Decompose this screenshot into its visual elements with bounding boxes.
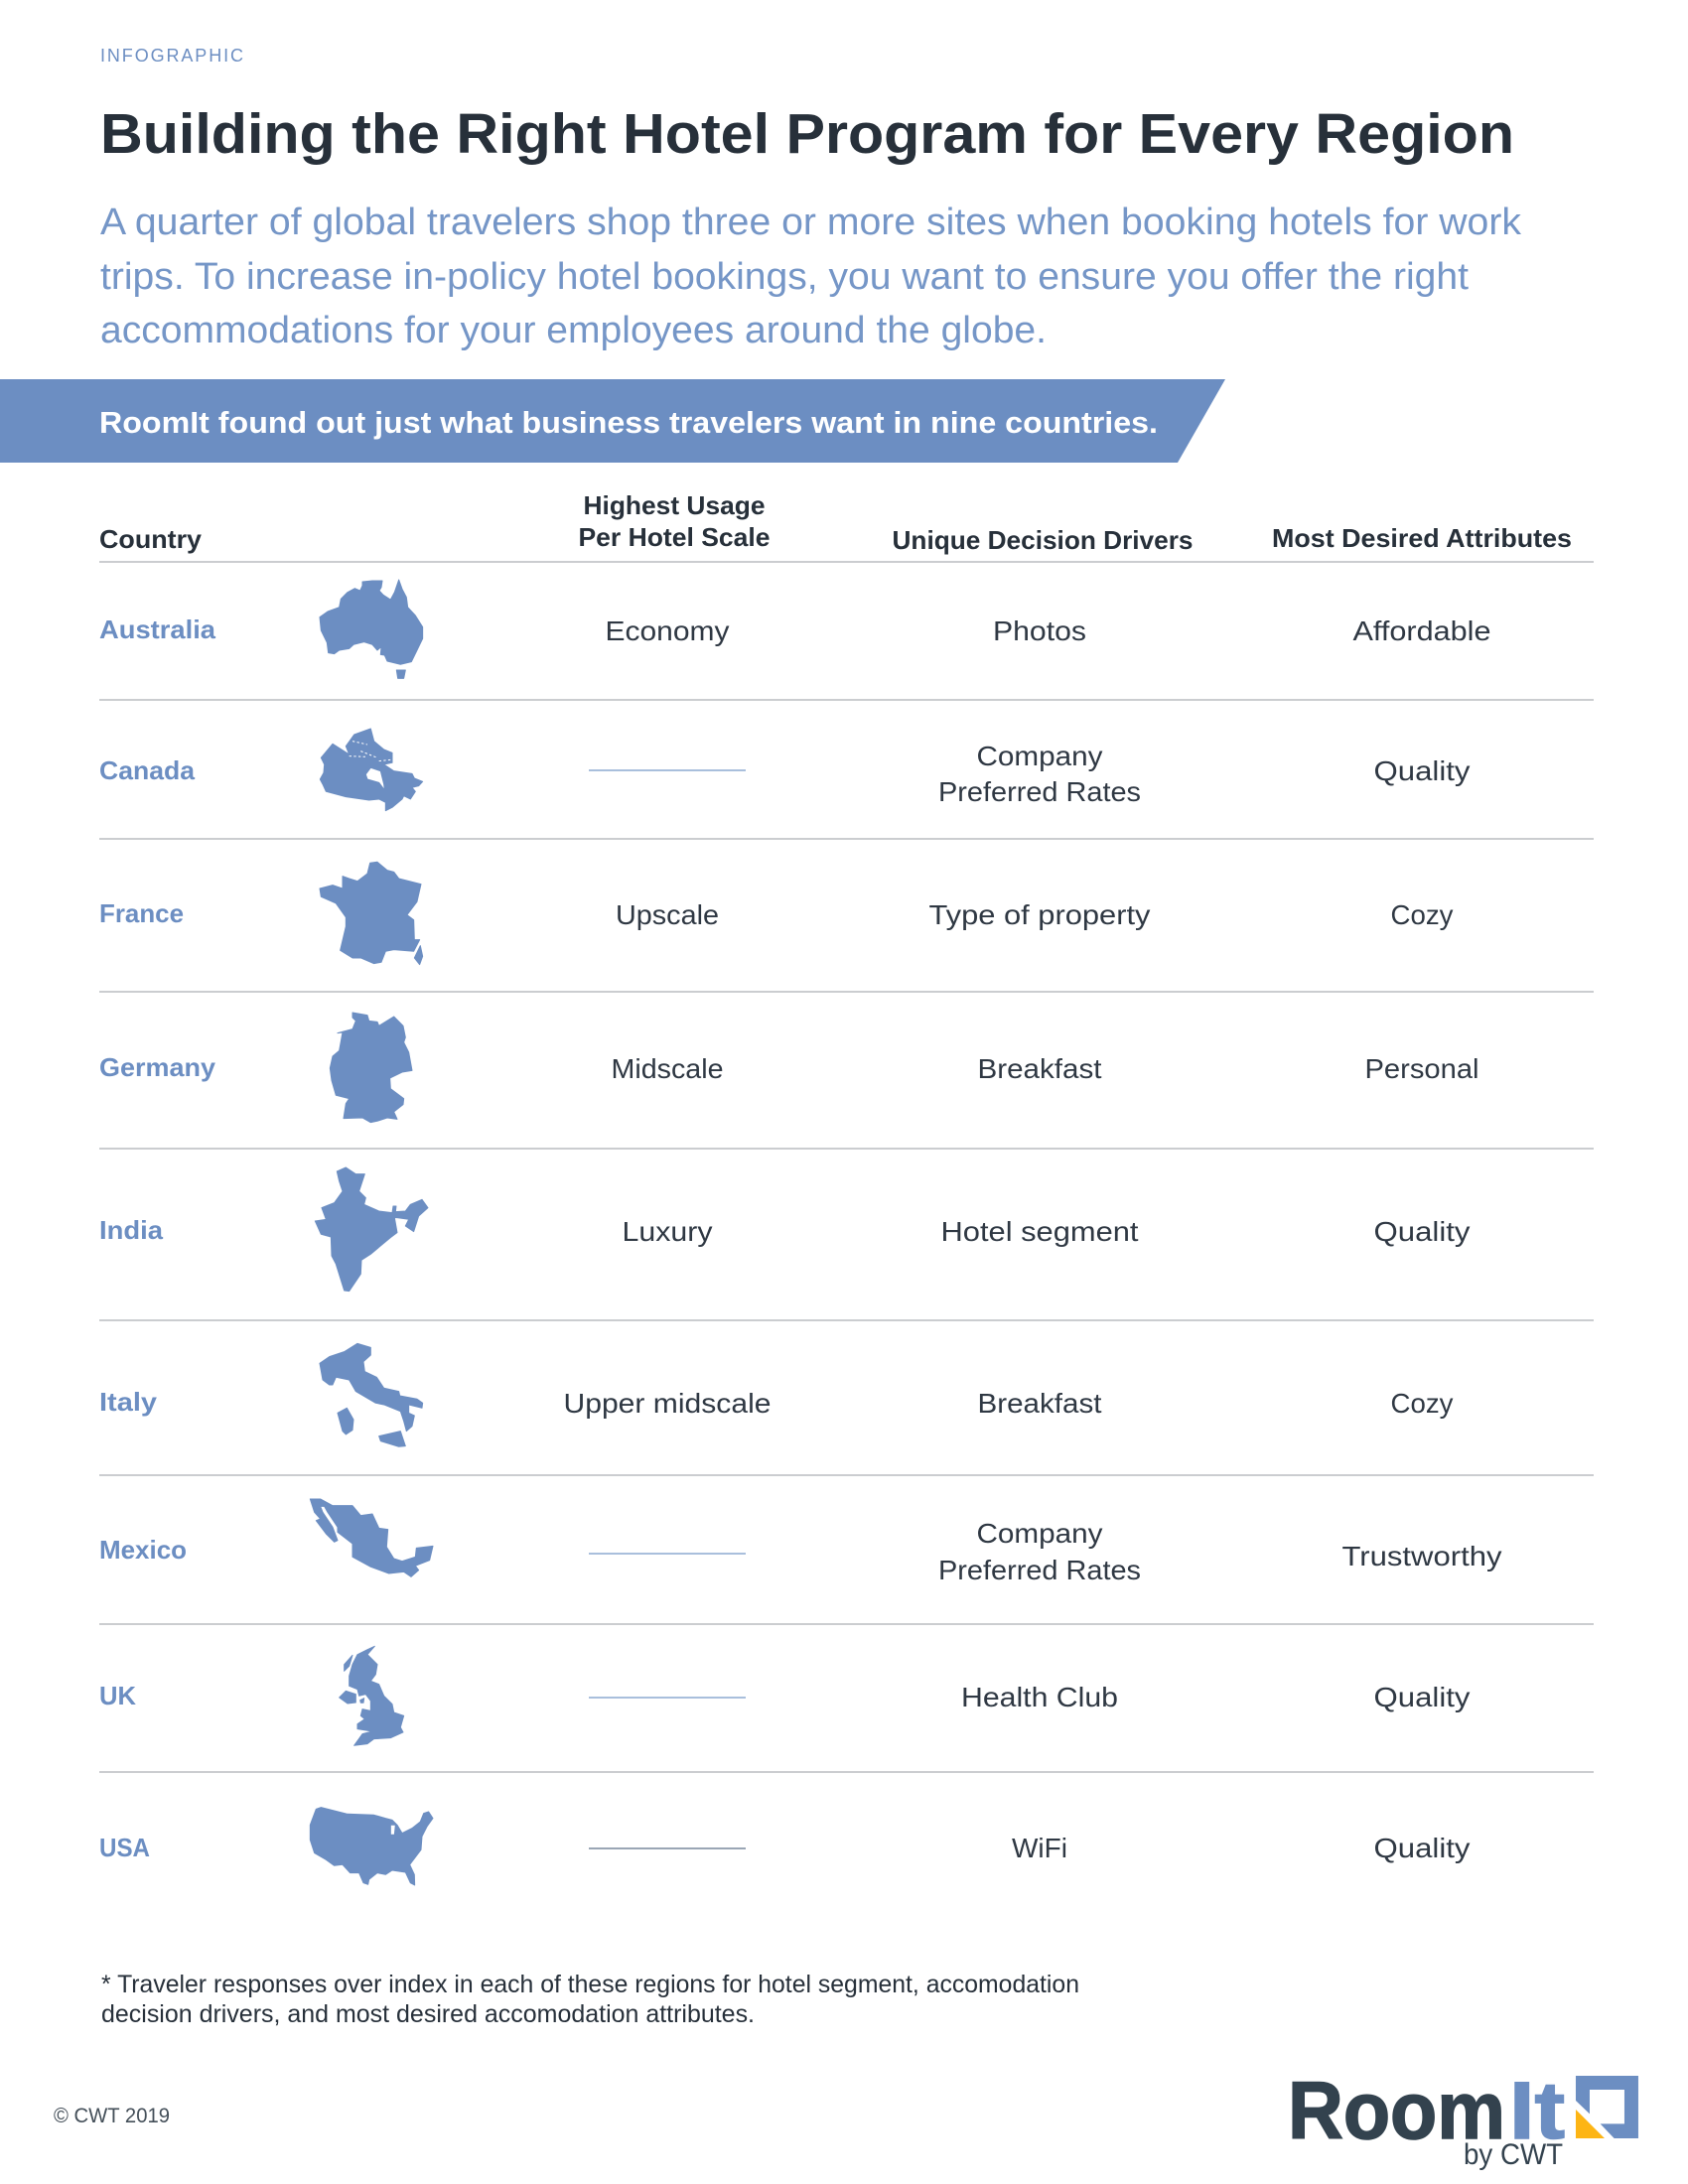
row: Germany: Personal bbox=[1364, 1053, 1479, 1084]
intro paragraph bbox=[100, 202, 1522, 351]
row: Mexico bbox=[99, 1499, 1501, 1585]
row: Germany: Breakfast bbox=[977, 1053, 1102, 1084]
row: Italy: Breakfast bbox=[977, 1388, 1102, 1419]
row: UK: Health Club bbox=[961, 1682, 1118, 1712]
row: Mexico: Preferred Rates bbox=[938, 1555, 1141, 1585]
row: Australia: Photos bbox=[993, 615, 1086, 646]
icon: map of Canada bbox=[320, 729, 423, 811]
row: India bbox=[99, 1167, 1470, 1292]
row: Canada: Company bbox=[977, 741, 1102, 771]
country name: Italy: Italy bbox=[99, 1387, 158, 1417]
country name: Australia: Australia bbox=[99, 614, 216, 644]
footnote bbox=[101, 1971, 1079, 2028]
logo: RoomIt by CWT: by CWT bbox=[1464, 2138, 1563, 2171]
country name: Germany: Germany bbox=[99, 1052, 216, 1082]
intro paragraph: accommodations for your employees around the globe. bbox=[100, 310, 1047, 351]
icon: map of Mexico bbox=[310, 1499, 433, 1576]
row: France bbox=[99, 862, 1454, 965]
table header: Highest Usage bbox=[584, 490, 765, 520]
table header: Country bbox=[99, 524, 203, 554]
row: Australia bbox=[99, 580, 1491, 678]
country name: Canada: Canada bbox=[99, 755, 196, 785]
icon: map of Australia bbox=[320, 580, 423, 678]
icon: map of Italy bbox=[320, 1343, 423, 1446]
row: Italy: Cozy bbox=[1390, 1388, 1454, 1419]
table header: Unique Decision Drivers bbox=[892, 525, 1194, 555]
row: France: Cozy bbox=[1390, 899, 1454, 930]
row: France: Type of property bbox=[929, 899, 1150, 930]
banner: RoomIt found out just what business travelers want in nine countries. bbox=[99, 405, 1158, 440]
row: Canada: Quality bbox=[1374, 755, 1470, 786]
icon: map of France bbox=[320, 862, 423, 965]
title: Building the Right Hotel Program for Every Region bbox=[100, 102, 1514, 166]
table header bbox=[99, 490, 1572, 555]
row: Canada bbox=[99, 729, 1470, 811]
row: Australia: Affordable bbox=[1352, 615, 1491, 646]
row: Italy: Upper midscale bbox=[564, 1388, 771, 1419]
country name: India: India bbox=[99, 1215, 164, 1245]
row: Germany bbox=[99, 1013, 1479, 1123]
table header: Per Hotel Scale bbox=[578, 522, 771, 552]
row: USA: WiFi bbox=[1012, 1833, 1067, 1863]
row: Italy bbox=[99, 1343, 1454, 1446]
row: India: Luxury bbox=[622, 1216, 713, 1247]
footnote: * Traveler responses over index in each of these regions for hotel segment, accomodation bbox=[101, 1971, 1079, 1998]
row: UK: Quality bbox=[1374, 1682, 1470, 1712]
icon: map of UK bbox=[340, 1646, 404, 1745]
country name: UK: UK bbox=[99, 1681, 136, 1710]
row: France: Upscale bbox=[616, 899, 719, 930]
logo: RoomIt by CWT: It bbox=[1509, 2066, 1565, 2156]
logo: RoomIt by CWT bbox=[1288, 2066, 1638, 2171]
row: Mexico: Trustworthy bbox=[1342, 1541, 1501, 1571]
row: Australia: Economy bbox=[606, 615, 729, 646]
icon: map of USA bbox=[310, 1808, 433, 1885]
logo: RoomIt by CWT: Room bbox=[1288, 2066, 1505, 2156]
copyright: © CWT 2019 bbox=[54, 2105, 170, 2127]
intro paragraph: trips. To increase in-policy hotel bookings, you want to ensure you offer the right bbox=[100, 256, 1469, 298]
row: UK bbox=[99, 1646, 1470, 1745]
table header: Most Desired Attributes bbox=[1272, 523, 1572, 553]
icon: map of India bbox=[315, 1167, 428, 1292]
icon: map of Germany bbox=[330, 1013, 412, 1123]
country name: USA: USA bbox=[99, 1833, 150, 1862]
row: USA: Quality bbox=[1374, 1833, 1470, 1863]
banner bbox=[0, 379, 1225, 463]
country name: Mexico: Mexico bbox=[99, 1535, 187, 1565]
intro paragraph: A quarter of global travelers shop three or more sites when booking hotels for work bbox=[100, 202, 1522, 243]
country name: France: France bbox=[99, 898, 184, 928]
row: USA bbox=[99, 1808, 1470, 1885]
row: India: Hotel segment bbox=[941, 1216, 1139, 1247]
footnote: decision drivers, and most desired accomodation attributes. bbox=[101, 2000, 755, 2028]
icon: logo square bbox=[1576, 2076, 1638, 2138]
row: Canada: Preferred Rates bbox=[938, 776, 1141, 807]
row: India: Quality bbox=[1374, 1216, 1470, 1247]
eyebrow label: INFOGRAPHIC bbox=[100, 46, 243, 66]
row: Mexico: Company bbox=[977, 1518, 1102, 1549]
row: Germany: Midscale bbox=[612, 1053, 723, 1084]
